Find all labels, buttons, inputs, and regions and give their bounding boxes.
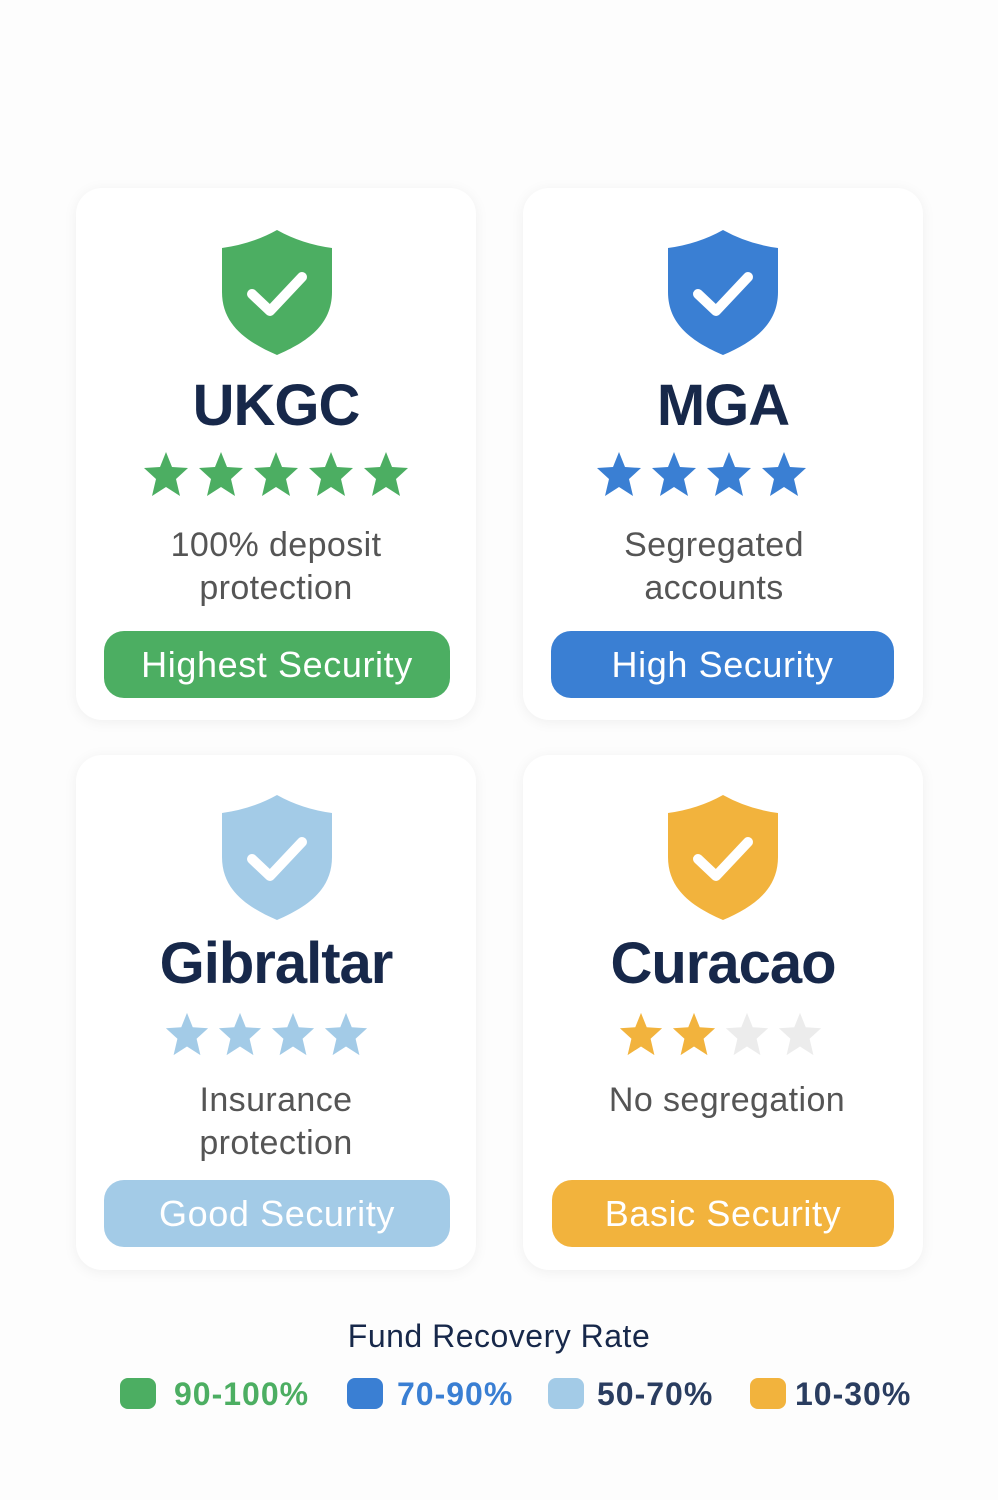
description (199, 1081, 353, 1162)
description: protection (199, 1124, 353, 1162)
description: Segregated (624, 526, 804, 564)
badge: Basic Security (605, 1193, 841, 1234)
card: Gibraltar (76, 755, 476, 1270)
badge (551, 631, 894, 698)
legend title: Fund Recovery Rate (348, 1318, 650, 1354)
legend item: green (120, 1376, 309, 1412)
description: protection (199, 569, 353, 607)
title: UKGC (193, 373, 359, 438)
legend: 10-30% (795, 1376, 911, 1412)
legend: 70-90% (397, 1376, 513, 1412)
description (624, 526, 804, 607)
card: UKGC (76, 188, 476, 720)
card: Curacao (523, 755, 923, 1270)
icon: blue shield (668, 230, 778, 355)
card: MGA (523, 188, 923, 720)
description: 100% deposit (171, 526, 381, 564)
rating stars (166, 1013, 367, 1055)
description: Insurance (200, 1081, 352, 1119)
title: MGA (657, 373, 789, 438)
legend item: light blue (548, 1376, 713, 1412)
icon: light blue shield (222, 795, 332, 920)
icon: orange shield (668, 795, 778, 920)
badge: High Security (612, 644, 833, 685)
description: No segregation (609, 1081, 845, 1119)
rating stars (597, 452, 806, 496)
title: Curacao (610, 931, 836, 996)
rating stars (144, 452, 408, 496)
description (171, 526, 381, 607)
badge (104, 631, 450, 698)
badge (552, 1180, 894, 1247)
legend: 90-100% (174, 1376, 309, 1412)
description: accounts (644, 569, 784, 607)
rating stars (620, 1013, 821, 1055)
title: Gibraltar (160, 931, 392, 996)
badge (104, 1180, 450, 1247)
legend item: blue (347, 1376, 513, 1412)
icon: green shield (222, 230, 332, 355)
badge: Highest Security (141, 644, 413, 685)
legend: 50-70% (597, 1376, 713, 1412)
legend item: orange (750, 1376, 911, 1412)
badge: Good Security (159, 1193, 395, 1234)
